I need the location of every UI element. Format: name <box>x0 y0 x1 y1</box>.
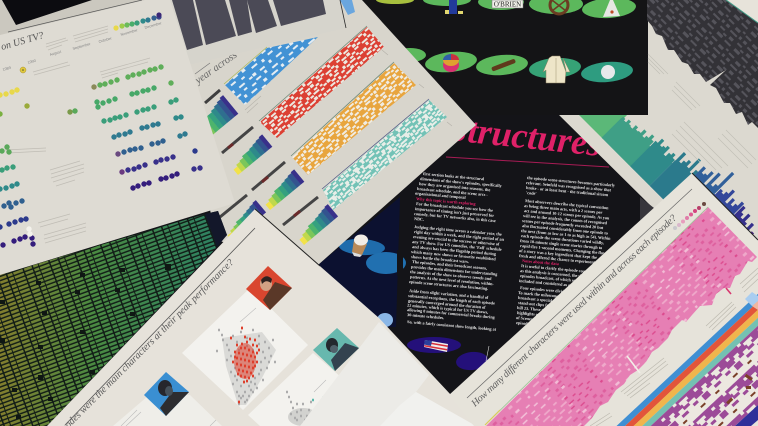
dark blue stripe <box>735 405 758 426</box>
grey scatter dots <box>216 330 276 404</box>
highlighted yellow dot <box>20 67 26 73</box>
body text: first column: provides the main dimensions for understanding <box>411 264 498 277</box>
grey scatter blob <box>288 408 318 426</box>
teal scatter dots <box>312 396 342 424</box>
body text: first column: 22 minutes, which is typical for US TV shows, <box>407 303 488 315</box>
grey bar chart <box>172 0 326 50</box>
rainbow stripes <box>616 294 758 426</box>
body text: second column: will see in the analysis, the counts of recognised <box>523 213 608 225</box>
word texture <box>0 214 217 426</box>
small chart row 2 <box>222 127 272 175</box>
small chart row 5 fragment <box>220 195 266 241</box>
page: peak performance scatterplots <box>47 209 480 426</box>
body text: first column: Judging the right time across a calendar year, the <box>414 224 502 237</box>
body text: second column: as this analysis is concerned, the show has <box>520 268 595 280</box>
page: dark structures text page <box>318 108 616 372</box>
photo: blue portrait <box>144 372 189 416</box>
small chart row 4 <box>283 197 338 245</box>
page: black icon page <box>350 0 647 115</box>
strip chart: red <box>259 26 384 138</box>
heading rule <box>195 63 210 74</box>
heading rule <box>8 0 142 32</box>
body text: second column: scenes per episode frequently exceeded 20 but <box>522 218 604 230</box>
dark fragment beneath <box>640 197 654 222</box>
page: dot chart on US TV <box>0 0 235 275</box>
body text: first column: right day within a week, and the right period of an <box>414 229 505 242</box>
photo: teal portrait <box>313 328 359 371</box>
dark gaps in the word wall <box>0 264 171 419</box>
body text: second column: broke - or at least bent - the traditional sitcom <box>526 185 609 197</box>
panel: scatter for first character <box>182 288 308 410</box>
body text: second column: rapid-fire 1-second moments. Changing the flow <box>520 243 606 256</box>
page: grey bars page <box>170 0 346 65</box>
icon: O'Brien sign: O'BRIEN <box>494 0 521 8</box>
strip labels <box>245 50 452 126</box>
small key squares <box>745 292 758 310</box>
small axis text fragments <box>121 308 366 426</box>
body text: second column: To mark the milestone episode <box>518 290 573 300</box>
blue fragment near top edge <box>340 0 355 15</box>
body text: first column: first section looks at the structural <box>423 171 485 181</box>
photo: red portrait <box>246 266 292 310</box>
episode dots by month and year <box>0 67 200 245</box>
body text: first column: shows battle the broadcast wars. <box>411 254 469 264</box>
heading: on US TV? <box>0 30 45 53</box>
annotation text blocks <box>590 268 758 426</box>
strip chart: orange <box>291 62 416 175</box>
month labels: 1989 <box>2 66 11 72</box>
body text: second column: It is useful to clarify the episode counts <box>521 263 591 274</box>
red scatter dots <box>230 328 260 402</box>
body text: first column: which many new shows or favourite established <box>411 249 497 261</box>
body text: second column: stand-out clips from <box>518 300 555 308</box>
icon: cigar <box>491 58 516 72</box>
body text: first column: organisational and temporal <box>415 191 467 200</box>
body text: first column: any TV show. For US comedies, the 'Fall' schedule <box>412 239 502 252</box>
heading rule <box>467 189 692 398</box>
annotation text blocks <box>648 54 756 170</box>
chart heading fragment: year across <box>193 50 239 87</box>
body text: second column: from 10-minute single scene stories through to <box>520 238 602 250</box>
page: top-left corner fragment with black panel <box>0 0 175 45</box>
body text: first column: Aside from slight variation, and a handful of <box>409 288 489 300</box>
small chart row 1 <box>189 90 238 142</box>
white paper fragment <box>300 322 476 426</box>
body text: second column: included and considered as one <box>519 278 575 288</box>
body text: second column: of Scenes <box>516 315 533 321</box>
month labels: December <box>144 21 163 30</box>
body text: second column: each episode the scene durations varied wildly, <box>521 233 604 245</box>
body text: second column: bill 23. These were <box>517 305 550 313</box>
red blob underlay <box>234 343 256 379</box>
body text: first column: dimensions of the show's episodes, specifically <box>420 176 503 188</box>
month labels <box>2 21 163 72</box>
icon: purple oval with thin line <box>455 346 489 372</box>
body text: first column: episode scene structures are also fascinating. <box>409 279 488 291</box>
body text: first column: NBC. <box>414 216 424 222</box>
body text: first column: how they are organised into seasons, the <box>419 181 491 192</box>
legend dots <box>116 17 159 28</box>
panel: scatter for second character <box>248 353 385 426</box>
heading rule <box>446 157 609 167</box>
grey scatter dots <box>286 392 348 424</box>
page: right page with stepped bar chart and mosaic <box>559 0 758 268</box>
heading: How many different characters were used within and across each episode? <box>469 213 679 410</box>
icon: coffee cup <box>352 234 368 257</box>
mosaic chart <box>647 0 758 128</box>
body text: first column: Why this topic is worth exploring <box>416 196 477 206</box>
heading rule <box>65 228 255 425</box>
body text: second column: act and around 10-12 scenes per episode. As you <box>524 208 610 221</box>
body text: first column: and always has been the flagship period during <box>412 244 497 256</box>
body text: first column: the analysis of the show to observe trends and <box>410 269 492 281</box>
heatmap: pink <box>485 207 757 426</box>
icon: pretzel <box>550 0 568 14</box>
annotation text blocks <box>5 26 150 243</box>
body text: first column: patterns. At the next level of resolution, within- <box>410 274 495 286</box>
grey scatter fan <box>222 332 276 405</box>
body text: second column: highlights of <box>517 310 540 317</box>
body text: second column: 'code' <box>526 190 537 196</box>
navy page fragment with icons <box>318 197 406 327</box>
page: charts across the year, coloured scatter strips <box>186 0 476 265</box>
month labels: November <box>120 28 139 37</box>
month labels: 1990 <box>27 59 36 65</box>
icon: goldfish bag <box>603 0 620 17</box>
month labels: August <box>49 50 63 57</box>
body text: second column: Four episodes were divided in two <box>520 285 581 295</box>
body text: second column: broadcast a special of the <box>518 295 563 304</box>
body text: second column: of a story was a key ingredient that kept the <box>519 248 597 260</box>
green oval row 1 with icons <box>376 0 637 20</box>
body text: second column: Notes about the data <box>522 258 560 266</box>
body text: first column <box>407 171 505 332</box>
body text: second column: fresh and offered the chance to experiment <box>519 253 596 265</box>
legend dots <box>673 202 706 230</box>
body text: first column: comedy, but for TV networks also, in this case <box>414 211 496 223</box>
page: how many characters heatmap <box>449 173 758 426</box>
green oval row 2 with icons <box>394 48 634 84</box>
body text: first column: evening are crucial to the success or otherwise of <box>413 234 500 247</box>
block chart: purple and brown <box>651 326 758 426</box>
strip chart: blue <box>224 37 318 105</box>
icon: legs <box>445 0 463 14</box>
body text: first column: broadcast schedule, and the scene arcs - <box>417 186 489 197</box>
small chart row 3 <box>252 162 304 210</box>
body text: first column: So, with a fairly consistent show length, looking at <box>407 319 497 332</box>
body text: first column: 30-minute schedules. <box>407 312 444 320</box>
body text: second column: as being three main acts, with a 2 scenes per <box>524 203 603 215</box>
body text: second column: episode <box>516 320 530 326</box>
stepped bar chart, green to purple <box>591 79 758 268</box>
icon: trench coat <box>543 56 570 83</box>
body text: second column <box>516 175 616 326</box>
month labels: October <box>98 36 113 44</box>
body text: first column: importance of timing isn't just preserved for <box>415 206 494 218</box>
body text: second column: relevant. Seinfeld was recognised as a show that <box>526 180 612 192</box>
navy corner <box>205 211 227 247</box>
body text: second column: Most observers describe the typical convention <box>525 198 609 210</box>
icon: flag on purple oval <box>407 337 461 353</box>
body text: first column: substantial exceptions, the length of each episode <box>408 293 495 306</box>
panel: third chart fragment <box>113 395 222 426</box>
body text: second column: the episode scene structures becomes particularly <box>527 175 616 188</box>
month labels: September <box>72 42 92 51</box>
body text: second column: also fluctuated considerably from one episode to <box>522 223 608 235</box>
body text: second column: episodes broadcast, of which some are <box>520 273 588 284</box>
body text: second column: the next (from as low as 1 to as high as 54). Within <box>521 228 611 241</box>
body text: first column: generally converged around the duration of <box>408 298 486 310</box>
body text: first column: The episodes, and their broadcast seasons, <box>412 259 487 271</box>
body text: first column: For the broadcast schedule you see how the <box>416 201 493 213</box>
icon: pie chart <box>443 54 459 72</box>
strip chart: teal <box>322 99 447 210</box>
body text: first column: allowing 8 minutes for commercial breaks during <box>407 307 496 320</box>
icon: golf ball <box>601 65 615 79</box>
page: green word wall <box>0 211 227 426</box>
corner fragment with teal edge <box>726 0 758 23</box>
heading: Structures: Structures <box>446 108 603 164</box>
